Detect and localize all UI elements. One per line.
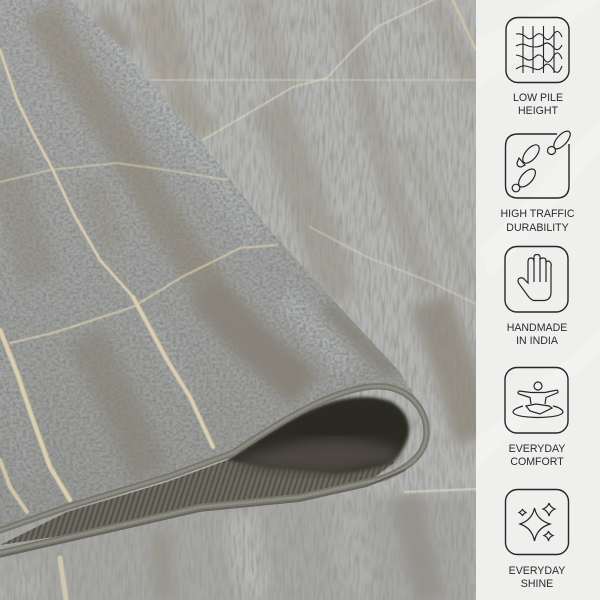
- folded rug top: [0, 0, 416, 527]
- icon: low pile height: [506, 18, 569, 82]
- icon: meditation, everyday comfort: [505, 368, 568, 433]
- floor cream lines: [60, 0, 476, 600]
- label: everyday comfort: COMFORT: [510, 456, 564, 468]
- sidebar panel: [476, 0, 600, 600]
- label: low pile height: LOW PILE: [513, 92, 563, 104]
- label: handmade in india: HANDMADE: [507, 322, 567, 334]
- label: low pile height: HEIGHT: [518, 105, 559, 117]
- label: everyday comfort: EVERYDAY: [509, 443, 565, 455]
- label: handmade in india: IN INDIA: [516, 335, 559, 347]
- rug photo: [0, 0, 476, 600]
- dark underside of the fold: [0, 397, 409, 545]
- floor rug: [0, 0, 476, 600]
- label: everyday shine: SHINE: [521, 578, 553, 590]
- label: everyday shine: EVERYDAY: [509, 565, 565, 577]
- icon: hand, handmade: [505, 246, 568, 312]
- label: high traffic durability: HIGH TRAFFIC: [501, 208, 575, 220]
- label: high traffic durability: DURABILITY: [506, 222, 569, 234]
- icon: footprints, high traffic: [506, 128, 573, 198]
- fold cream lines: [0, 50, 277, 512]
- rolled edge binding: [0, 386, 426, 558]
- icon: sparkles, everyday shine: [506, 490, 568, 554]
